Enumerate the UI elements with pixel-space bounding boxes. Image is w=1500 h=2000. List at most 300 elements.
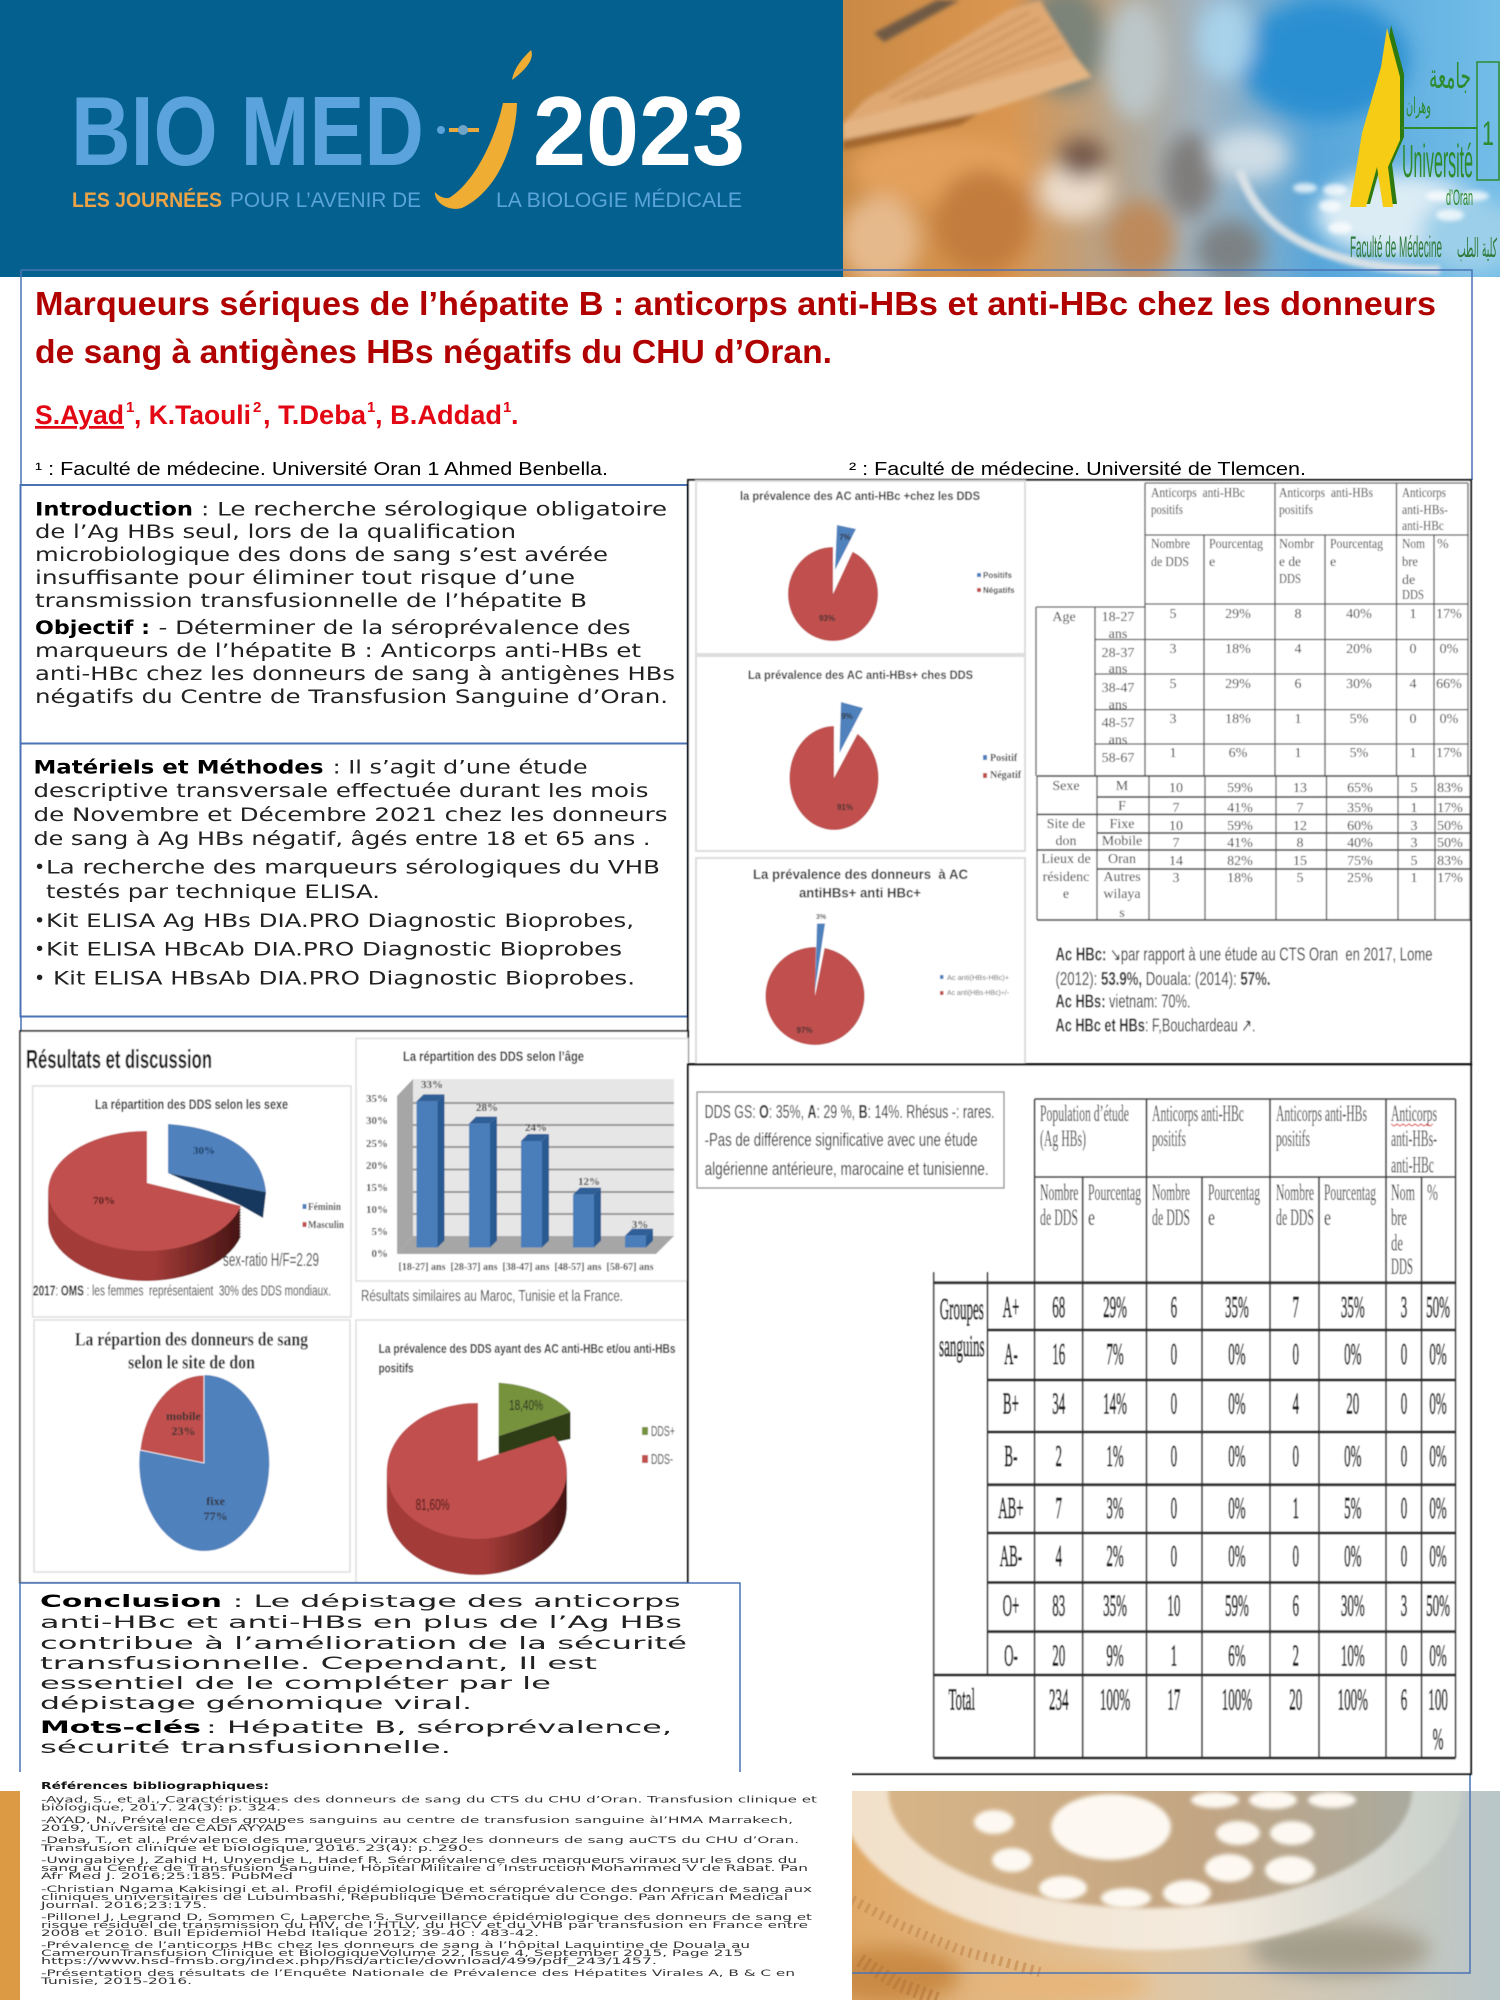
table: markers by blood group: de (1391, 1230, 1403, 1256)
table: demographic characteristics: Age (1052, 610, 1076, 625)
table: demographic characteristics: 17% (1436, 746, 1462, 761)
table: demographic characteristics: 50% (1437, 819, 1463, 834)
chart: donors by donation site pie: 77% (204, 1509, 228, 1523)
chart: donors by sex, 3D pie (33, 1086, 351, 1317)
table: demographic characteristics: 82% (1227, 854, 1253, 869)
panel: materials and methods: La recherche des marqueurs sérologiques du VHB (46, 857, 660, 879)
table: demographic characteristics: 8 (1294, 607, 1302, 622)
table: markers by blood group: 30% (1341, 1590, 1365, 1623)
table: demographic characteristics: 0 (1410, 642, 1416, 657)
table: markers by blood group: A- (1004, 1338, 1018, 1372)
panel: introduction and objective: Introduction (35, 500, 193, 520)
panel: references: risque résiduel de transmission du HIV, de l’HTLV, du HCV et du VHB par transfusion en France entre (41, 1920, 809, 1931)
table: demographic characteristics: Mobile (1102, 834, 1142, 849)
table: markers by blood group: B+ (1003, 1387, 1019, 1421)
panel: materials and methods: de Novembre et Décembre 2021 chez les donneurs (34, 804, 668, 826)
authors: , T.Deba (263, 400, 367, 430)
table: markers by blood group: 0% (1228, 1440, 1246, 1474)
table: markers by blood group: 50% (1426, 1291, 1450, 1325)
panel: references: sang au Centre de Transfusion Sanguine, Hôpital Militaire d´Instruction Mohammed V de Rabat. Pan (41, 1863, 808, 1874)
table: markers by blood group: 0% (1429, 1492, 1447, 1526)
chart: donors with anti-HBc and/or anti-HBs 3D pie: DDS+ (651, 1423, 675, 1440)
table: demographic characteristics: de (1402, 573, 1415, 588)
title (35, 285, 1436, 370)
table: markers by blood group (934, 1099, 1456, 1758)
chart: donors by age, 3D bars: 33% (421, 1079, 443, 1091)
panel: references: -Prévalence de l’anticorps HBc chez les donneurs de sang à l’hôpital Laquintine de Douala au (41, 1940, 750, 1951)
chart: anti-HBs and anti-HBc prevalence pie: 3% (816, 914, 827, 921)
chart: anti-HBs and anti-HBc prevalence pie: Ac anti(HBs-HBc)+/- (947, 990, 1010, 997)
table: markers by blood group: (Ag HBs) (1040, 1126, 1086, 1151)
panel: references (20, 1772, 852, 2000)
chart: donors by age, 3D bars: [58-67] ans (607, 1262, 654, 1273)
panel: references: Références bibliographiques: (41, 1780, 269, 1792)
panel: references: Journal. 2016;23:175. (39, 1901, 207, 1911)
table: markers by blood group: Pourcentag (1088, 1180, 1141, 1205)
table: markers by blood group: Pourcentag (1324, 1180, 1376, 1205)
table: demographic characteristics: 7 (1172, 836, 1180, 851)
table: markers by blood group: 2 (1292, 1640, 1299, 1673)
chart: anti-HBc prevalence pie: 93% (819, 614, 835, 623)
table: demographic characteristics: ans (1109, 733, 1127, 748)
authors: . (511, 400, 519, 430)
chart: anti-HBs and anti-HBc prevalence pie (696, 858, 1025, 1064)
table: markers by blood group: 0 (1171, 1440, 1177, 1474)
table: markers by blood group: Total (949, 1684, 975, 1718)
BIOMED-J 2023 logo: LA BIOLOGIE MÉDICALE (496, 189, 742, 212)
table: demographic characteristics: 6 (1294, 677, 1302, 692)
table: markers by blood group: 10% (1341, 1640, 1365, 1673)
table: markers by blood group: 20 (1052, 1640, 1065, 1673)
table: demographic characteristics: 7 (1296, 801, 1304, 816)
table: demographic characteristics: 20% (1346, 642, 1372, 657)
table: markers by blood group: 3 (1401, 1590, 1407, 1623)
chart: donors by sex, 3D pie: 2017: OMS : les femmes représentaient 30% des DDS mondiaux. (33, 1283, 331, 1300)
panel: references: -Uwingabiye J, Zahid H, Unyendje L, Hadef R. Séroprévalence des marqueurs viraux sur les dons du (41, 1855, 797, 1866)
panel: prevalence charts and demographic table (688, 480, 1471, 1064)
table: markers by blood group: 0% (1429, 1440, 1447, 1474)
panel: references: -Christian Ngama Kakisingi et al. Profil épidémiologique et séroprévalence des donneurs de sang aux (41, 1884, 813, 1895)
table: markers by blood group: O- (1004, 1640, 1018, 1673)
panel: materials and methods: Kit ELISA Ag HBs DIA.PRO Diagnostic Bioprobes, (46, 910, 634, 932)
table: markers by blood group: 1 (1171, 1640, 1177, 1673)
text block: comparison with other studies: Ac HBs: vietnam: 70%. (1056, 992, 1190, 1012)
authors: , B.Addad (375, 400, 502, 430)
table: demographic characteristics: Pourcentag (1209, 537, 1263, 552)
table: demographic characteristics: anti-HBs- (1402, 503, 1448, 518)
chart: donors with anti-HBc and/or anti-HBs 3D pie: 81,60% (416, 1497, 450, 1514)
panel: conclusion and keywords: Mots-clés (40, 1718, 201, 1738)
table: demographic characteristics: 10 (1169, 819, 1183, 834)
text block: comparison with other studies: (2012): 53.9%, Douala: (2014): 57%. (1056, 969, 1270, 989)
table: demographic characteristics: 48-57 (1102, 716, 1134, 731)
table: markers by blood group: 0% (1429, 1540, 1447, 1574)
chart: donors by donation site pie: fixe (206, 1494, 226, 1508)
table: demographic characteristics: 38-47 (1102, 681, 1134, 696)
university emblem: lion and faculty name (1350, 25, 1499, 264)
table: demographic characteristics: 18% (1227, 871, 1253, 886)
panel: references: https://www.hsd-fmsb.org/index.php/hsd/article/download/499/pdf_243/1457. (41, 1957, 657, 1967)
panel: materials and methods: • (34, 968, 45, 990)
table: demographic characteristics: bre (1402, 555, 1418, 570)
table: markers by blood group: Groupes (940, 1293, 984, 1327)
table: markers by blood group: 0 (1292, 1540, 1299, 1574)
chart: anti-HBc prevalence pie: 7% (839, 533, 851, 542)
table: demographic characteristics: 1 (1294, 712, 1302, 727)
table: demographic characteristics: de DDS (1151, 555, 1189, 570)
panel: materials and methods: Matériels et Méthodes (34, 757, 324, 779)
panel: materials and methods: Kit ELISA HBcAb DIA.PRO Diagnostic Bioprobes (46, 938, 622, 960)
table: markers by blood group: e (1324, 1205, 1331, 1230)
panel: materials and methods: • (34, 910, 45, 932)
panel: materials and methods: de sang à Ag HBs négatif, âgés entre 18 et 65 ans . (34, 828, 650, 850)
table: demographic characteristics: 7 (1172, 801, 1180, 816)
table: demographic characteristics: Anticorps anti-HBs (1279, 486, 1373, 501)
table: demographic characteristics: 1 (1410, 801, 1418, 816)
table: markers by blood group: 4 (1056, 1540, 1062, 1574)
table: markers by blood group: 35% (1225, 1291, 1249, 1325)
table: demographic characteristics: 10 (1169, 781, 1183, 796)
table: markers by blood group: Anticorps anti-HBc (1152, 1101, 1244, 1126)
chart: donors by age, 3D bars: [28-37] ans (451, 1262, 498, 1273)
table: markers by blood group: 35% (1103, 1590, 1127, 1623)
table: markers by blood group: 0% (1228, 1540, 1246, 1574)
table: demographic characteristics: 28-37 (1102, 646, 1134, 661)
table: demographic characteristics: s (1119, 906, 1125, 921)
table: demographic characteristics: 75% (1347, 854, 1373, 869)
chart: donors by sex, 3D pie: Féminin (308, 1201, 341, 1213)
chart: anti-HBs prevalence pie: 91% (837, 803, 853, 812)
chart: anti-HBs prevalence pie: Positif (990, 753, 1018, 764)
table: markers by blood group: 1% (1106, 1440, 1124, 1474)
table: markers by blood group: O+ (1003, 1590, 1019, 1623)
table: markers by blood group: 1 (1292, 1492, 1299, 1526)
panel: references: biologique, 2017. 24(3): p. 324. (41, 1804, 281, 1814)
chart: donors by age, 3D bars: 35% (366, 1093, 388, 1105)
panel: introduction and objective: marqueurs de l’hépatite B : Anticorps anti-HBs et (35, 641, 641, 662)
table: markers by blood group: 0% (1344, 1440, 1361, 1474)
table: demographic characteristics: 18% (1225, 712, 1251, 727)
table: demographic characteristics: 58-67 (1102, 751, 1134, 766)
table: demographic characteristics: 0% (1440, 642, 1459, 657)
authors: , K.Taouli (134, 400, 251, 430)
table: markers by blood group: Nombre (1040, 1180, 1078, 1205)
chart: anti-HBc prevalence pie: Négatifs (983, 586, 1015, 595)
panel: conclusion and keywords: sécurité transfusionnelle. (40, 1738, 451, 1758)
table: demographic characteristics: résidenc (1043, 870, 1089, 885)
table: markers by blood group: 6 (1401, 1684, 1407, 1718)
callout: blood group summary (697, 1092, 1004, 1188)
table: demographic characteristics: 5 (1170, 677, 1176, 692)
table: demographic characteristics: 40% (1346, 607, 1372, 622)
table: demographic characteristics: 3 (1170, 712, 1176, 727)
table: demographic characteristics: 17% (1436, 607, 1462, 622)
table: markers by blood group: % (1433, 1723, 1444, 1757)
panel: introduction and objective (20, 485, 688, 744)
BIOMED-J 2023 logo: 2023 (533, 76, 745, 186)
table: markers by blood group: B- (1004, 1440, 1017, 1474)
table: demographic characteristics: 60% (1347, 819, 1373, 834)
table: demographic characteristics: 83% (1437, 854, 1463, 869)
panel: conclusion and keywords: dépistage génomique viral. (40, 1694, 472, 1714)
chart: donors by age, 3D bars: 30% (366, 1115, 388, 1127)
chart: anti-HBs prevalence pie (696, 656, 1025, 851)
panel: references: Transfusion clinique et biologique, 2016. 23(4): p. 290. (39, 1844, 473, 1854)
table: markers by blood group: Pourcentag (1208, 1180, 1260, 1205)
table: markers by blood group: de DDS (1276, 1205, 1314, 1230)
chart: donors by age, 3D bars: 12% (578, 1176, 600, 1188)
panel: references: Tunisie, 2015-2016. (39, 1977, 192, 1987)
panel: references: Afr Med J. 2016;25:185. PubMed (41, 1872, 293, 1882)
table: demographic characteristics: 1 (1410, 746, 1416, 761)
table: demographic characteristics: 3 (1170, 642, 1176, 657)
table: demographic characteristics: 17% (1437, 801, 1463, 816)
callout: blood group summary: algérienne antérieure, marocaine et tunisienne. (705, 1159, 989, 1179)
table: markers by blood group: e (1208, 1205, 1215, 1230)
table: markers by blood group: 29% (1103, 1291, 1127, 1325)
header photo collage (840, 0, 1500, 284)
table: demographic characteristics: Anticorps (1402, 486, 1446, 501)
authors: S.Ayad (35, 400, 124, 430)
chart: donors with anti-HBc and/or anti-HBs 3D pie: DDS- (651, 1451, 673, 1468)
chart: donors by age, 3D bars: 25% (366, 1138, 388, 1150)
table: demographic characteristics: 30% (1346, 677, 1372, 692)
table: markers by blood group: 0 (1401, 1338, 1407, 1372)
panel: materials and methods: • (34, 938, 45, 960)
table: markers by blood group: 34 (1052, 1387, 1065, 1421)
chart: donors by age, 3D bars: 24% (525, 1122, 547, 1134)
table: demographic characteristics: 5% (1350, 712, 1369, 727)
table: demographic characteristics: anti-HBc (1402, 519, 1444, 534)
chart: donors by donation site pie (34, 1320, 350, 1572)
table: demographic characteristics: e de (1279, 555, 1301, 570)
chart: anti-HBc prevalence pie: Positifs (983, 571, 1012, 580)
panel: conclusion and keywords: anti-HBc et anti-HBs en plus de l’Ag HBs (40, 1613, 682, 1633)
authors: 1 (126, 399, 134, 416)
panel: references: CamerounTransfusion Clinique et BiologiqueVolume 22, Issue 4, September 2015, Page 215 (41, 1949, 743, 1959)
table: markers by blood group: bre (1391, 1205, 1407, 1230)
affiliations: ² : Faculté de médecine. Université de Tlemcen. (849, 459, 1306, 479)
panel: introduction and objective: anti-HBc chez les donneurs de sang à antigènes HBs (35, 664, 675, 685)
table: demographic characteristics: e (1209, 555, 1215, 570)
table: demographic characteristics: 41% (1227, 836, 1253, 851)
chart: donors by sex, 3D pie: La répartition des DDS selon les sexe (95, 1096, 288, 1112)
authors: 1 (503, 399, 511, 416)
affiliations (35, 459, 1306, 479)
table: demographic characteristics: 50% (1437, 836, 1463, 851)
table: markers by blood group: anti-HBc (1391, 1152, 1434, 1178)
table: demographic characteristics: 25% (1347, 871, 1373, 886)
table: markers by blood group: 20 (1346, 1387, 1359, 1421)
chart: donors by age, 3D bars: 5% (372, 1226, 388, 1238)
table: demographic characteristics: 66% (1436, 677, 1462, 692)
header banner (0, 0, 1500, 284)
panel: conclusion and keywords: transfusionnelle. Cependant, Il est (40, 1654, 598, 1674)
table: demographic characteristics: Anticorps anti-HBc (1151, 486, 1245, 501)
table: markers by blood group: 4 (1292, 1387, 1299, 1421)
table: demographic characteristics: 59% (1227, 781, 1253, 796)
table: demographic characteristics: 35% (1347, 801, 1373, 816)
panel: introduction and objective: de l’Ag HBs seul, lors de la qualification (35, 522, 516, 543)
table: demographic characteristics: 5 (1410, 854, 1418, 869)
panel: introduction and objective: : Le recherche sérologique obligatoire (201, 500, 667, 520)
table: markers by blood group: 10 (1167, 1590, 1180, 1623)
table: demographic characteristics: 3 (1410, 836, 1418, 851)
table: markers by blood group: Nombre (1152, 1180, 1190, 1205)
table: demographic characteristics: 29% (1225, 607, 1251, 622)
panel: materials and methods: : Il s’agit d’une étude (333, 757, 588, 779)
table: markers by blood group: 14% (1103, 1387, 1127, 1421)
chart: donors by age, 3D bars: [18-27] ans (399, 1262, 446, 1273)
panel: references: cliniques universitaires de Lubumbashi, République Démocratique du Congo. Pan African Medical (41, 1892, 788, 1903)
bottom decorative photo band (0, 1630, 1500, 2000)
chart: donors by age, 3D bars (356, 1038, 688, 1281)
table: markers by blood group: A+ (1003, 1291, 1019, 1325)
chart: donors by donation site pie: selon le site de don (128, 1352, 255, 1374)
table: demographic characteristics: don (1056, 834, 1076, 849)
chart: donors by sex, 3D pie: sex-ratio H/F=2.29 (223, 1250, 319, 1270)
table: markers by blood group: Nombre (1276, 1180, 1314, 1205)
table: demographic characteristics: e (1330, 555, 1336, 570)
chart: donors by age, 3D bars: 20% (366, 1160, 388, 1172)
chart: donors by age, 3D bars: [48-57] ans (555, 1262, 602, 1273)
chart: donors by age, 3D bars: La répartition des DDS selon l’âge (403, 1048, 584, 1064)
table: demographic characteristics: 5 (1410, 781, 1418, 796)
panel: blood groups (688, 1065, 1471, 1774)
table: markers by blood group: 100% (1338, 1684, 1368, 1718)
table: demographic characteristics (1036, 483, 1470, 921)
table: markers by blood group: 0% (1344, 1540, 1361, 1574)
table: markers by blood group: 0 (1401, 1440, 1407, 1474)
panel: references: -Deba, T., et al., Prévalence des marqueurs viraux chez les donneurs de sang auCTS du CHU d’Oran. (41, 1835, 799, 1846)
authors: 1 (367, 399, 375, 416)
table: demographic characteristics: 8 (1296, 836, 1304, 851)
chart: donors by sex, 3D pie: 30% (193, 1145, 215, 1157)
table: demographic characteristics: 1 (1410, 871, 1418, 886)
BIOMED-J 2023 logo: BIO MED (71, 76, 424, 186)
table: demographic characteristics: Fixe (1110, 817, 1134, 832)
table: markers by blood group: 2% (1106, 1540, 1124, 1574)
chart: donors by sex, 3D pie: 70% (93, 1195, 115, 1207)
table: demographic characteristics: 3 (1410, 819, 1418, 834)
table: markers by blood group: 6% (1228, 1640, 1246, 1673)
panel: references: -Ayad, S., et al., Caractéristiques des donneurs de sang du CTS du CHU d’Oran. Transfusion clinique et (41, 1795, 818, 1806)
table: markers by blood group: 0 (1171, 1338, 1177, 1372)
table: markers by blood group: anti-HBs- (1391, 1126, 1437, 1151)
table: markers by blood group: 100% (1100, 1684, 1130, 1718)
panel: introduction and objective: transmission transfusionnelle de l’hépatite B (35, 591, 587, 612)
table: markers by blood group: de DDS (1040, 1205, 1078, 1230)
table: markers by blood group: Nom (1391, 1180, 1415, 1205)
chart: donors by donation site pie: mobile (166, 1409, 202, 1423)
table: demographic characteristics: F (1118, 799, 1126, 814)
table: markers by blood group: 0 (1401, 1492, 1407, 1526)
panel: conclusion and keywords: : Hépatite B, séroprévalence, (206, 1718, 672, 1738)
BIOMED-J 2023 logo (71, 50, 745, 212)
chart: donors by age, 3D bars: 3% (632, 1219, 648, 1231)
authors: 2 (253, 399, 261, 416)
panel: conclusion and keywords: Conclusion (40, 1592, 222, 1612)
panel: introduction and objective: insuffisante pour éliminer tout risque d’une (35, 568, 575, 589)
table: markers by blood group: 5% (1344, 1492, 1361, 1526)
table: demographic characteristics: Sexe (1052, 779, 1080, 794)
affiliations: ¹ : Faculté de médecine. Université Oran 1 Ahmed Benbella. (35, 459, 608, 479)
table: markers by blood group: 0 (1171, 1540, 1177, 1574)
table: markers by blood group: 0 (1292, 1338, 1299, 1372)
table: demographic characteristics: Autres (1103, 870, 1141, 885)
table: markers by blood group: 20 (1289, 1684, 1302, 1718)
table: demographic characteristics: % (1437, 537, 1449, 552)
table: markers by blood group: 7 (1056, 1492, 1062, 1526)
table: markers by blood group: 7 (1292, 1291, 1299, 1325)
table: demographic characteristics: 14 (1169, 854, 1183, 869)
panel: references: -AYAD, N., Prévalence des groupes sanguins au centre de transfusion sanguine àl’HMA Marrakech, (41, 1815, 793, 1826)
table: demographic characteristics: 41% (1227, 801, 1253, 816)
table: demographic characteristics: M (1116, 779, 1129, 794)
table: demographic characteristics: Nombre (1151, 537, 1190, 552)
chart: anti-HBs and anti-HBc prevalence pie: La prévalence des donneurs à AC (753, 866, 968, 882)
table: markers by blood group: 0 (1171, 1492, 1177, 1526)
table: demographic characteristics: 18% (1225, 642, 1251, 657)
table: markers by blood group: Anticorps (1391, 1101, 1437, 1126)
callout: blood group summary: DDS GS: O: 35%, A: 29 %, B: 14%. Rhésus -: rares. (705, 1102, 995, 1122)
table: demographic characteristics: 5 (1170, 607, 1176, 622)
table: markers by blood group: 234 (1049, 1684, 1069, 1718)
table: demographic characteristics: 1 (1294, 746, 1302, 761)
table: markers by blood group: 9% (1106, 1640, 1124, 1673)
chart: anti-HBc prevalence pie (696, 481, 1025, 654)
table: demographic characteristics: 6% (1229, 746, 1248, 761)
table: markers by blood group: 17 (1167, 1684, 1180, 1718)
panel: introduction and objective: - Déterminer de la séroprévalence des (158, 618, 630, 639)
table: demographic characteristics: 40% (1347, 836, 1373, 851)
table: demographic characteristics: DDS (1402, 588, 1424, 603)
text block: comparison with other studies: Ac HBc et HBs: F,Bouchardeau ↗. (1056, 1015, 1256, 1035)
panel: introduction and objective: microbiologique des dons de sang s’est avérée (35, 545, 608, 566)
table: markers by blood group: Population d’étude (1040, 1101, 1129, 1126)
table: demographic characteristics: 1 (1170, 746, 1176, 761)
table: markers by blood group: 0 (1401, 1640, 1407, 1673)
table: demographic characteristics: 5 (1296, 871, 1304, 886)
table: markers by blood group: 100% (1222, 1684, 1252, 1718)
chart: anti-HBs prevalence pie: Négatif (990, 770, 1022, 781)
table: markers by blood group: 6 (1171, 1291, 1177, 1325)
table: markers by blood group: 0% (1228, 1492, 1246, 1526)
table: markers by blood group: 3% (1106, 1492, 1124, 1526)
table: demographic characteristics: Oran (1108, 852, 1136, 867)
table: markers by blood group: 35% (1341, 1291, 1365, 1325)
table: markers by blood group: positifs (1276, 1126, 1310, 1151)
table: demographic characteristics: 5% (1350, 746, 1369, 761)
panel: references: -Présentation des résultats de l’Enquête Nationale de Prévalence des Hépatites Virales A, B & C en (41, 1968, 795, 1979)
chart: anti-HBs prevalence pie: La prévalence des AC anti-HBs+ ches DDS (748, 668, 973, 682)
text block: comparison with other studies (1056, 945, 1432, 1035)
chart: anti-HBs and anti-HBc prevalence pie: antiHBs+ anti HBc+ (799, 884, 921, 900)
chart: donors by age, 3D bars: [38-47] ans (503, 1262, 550, 1273)
table: markers by blood group: 68 (1052, 1291, 1065, 1325)
panel: materials and methods: • (34, 857, 45, 879)
panel: references: 2019, Université de CADI AYYAD (41, 1823, 286, 1834)
panel: materials and methods: testés par technique ELISA. (46, 881, 380, 903)
table: markers by blood group: sanguins (939, 1330, 985, 1364)
table: demographic characteristics: Nombr (1279, 537, 1314, 552)
chart: donors by donation site pie: 23% (172, 1424, 196, 1438)
table: markers by blood group: 2 (1056, 1440, 1062, 1474)
table: demographic characteristics: 0% (1440, 712, 1459, 727)
panel: materials and methods: descriptive transversale effectuée durant les mois (34, 780, 648, 802)
table: markers by blood group: 16 (1052, 1338, 1065, 1372)
table: demographic characteristics: 0 (1410, 712, 1416, 727)
